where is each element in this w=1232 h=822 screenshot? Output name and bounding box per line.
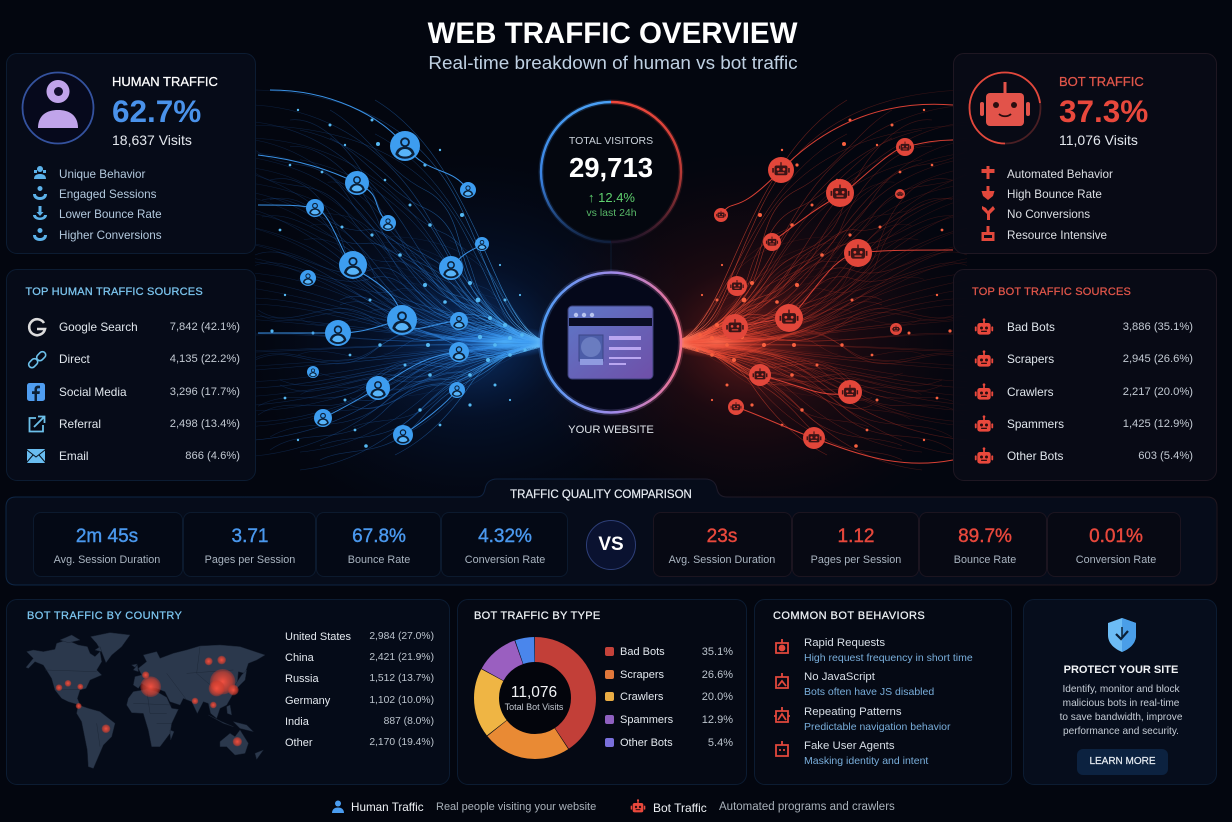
bot metric cells xyxy=(653,512,1181,577)
icon: shield xyxy=(1108,618,1136,652)
panel: protect your site: performance and security. xyxy=(1063,726,1179,736)
footer legend xyxy=(332,799,895,814)
panel: protect your site xyxy=(1023,599,1217,785)
icon: facebook xyxy=(27,383,45,401)
panel: protect your site: malicious bots in real-time xyxy=(1063,698,1179,709)
panel: bot traffic: Resource Intensive xyxy=(1007,228,1107,242)
panel: bot traffic: High Bounce Rate xyxy=(1007,188,1102,200)
panel: top bot sources: Other Bots xyxy=(1007,448,1063,462)
panel: bot traffic by type: 12.9% xyxy=(702,714,733,726)
text: Automated programs and crawlers xyxy=(719,800,895,812)
behavior icons xyxy=(774,639,790,757)
text: Pages per Session xyxy=(811,554,901,566)
behavior heading: COMMON BOT BEHAVIORS xyxy=(773,610,925,622)
vs badge: VS xyxy=(598,534,624,555)
panel: top human sources: Referral xyxy=(59,416,101,430)
panel: human traffic: Engaged Sessions xyxy=(59,188,156,200)
icon: crawlers xyxy=(974,383,994,400)
human traffic nodes xyxy=(300,131,489,445)
behavior: fake user agents xyxy=(804,740,928,767)
donut centre caption: Total Bot Visits xyxy=(505,702,563,712)
panel: bot traffic by country: Russia xyxy=(285,673,319,685)
text: 2m 45s xyxy=(76,526,138,546)
panel: bot traffic by country: Other xyxy=(285,736,313,748)
panel: bot traffic by country: 2,984 (27.0%) xyxy=(369,631,434,642)
panel: human traffic: Higher Conversions xyxy=(59,228,162,242)
panel: bot traffic by type: 20.0% xyxy=(702,691,733,703)
bot node links xyxy=(721,104,953,463)
panel: top bot sources: Scrapers xyxy=(1007,352,1054,366)
panel: top human sources: Direct xyxy=(59,352,90,366)
text: Conversion Rate xyxy=(465,554,545,566)
panel: common bot behaviors: Predictable navigation behavior xyxy=(804,720,951,732)
panel: bot traffic by type: Bad Bots xyxy=(620,646,665,658)
panel: top bot sources: 603 (5.4%) xyxy=(1138,450,1193,462)
panel: top human sources: 2,498 (13.4%) xyxy=(170,418,240,430)
text: 23s xyxy=(707,526,737,546)
icon: referral xyxy=(28,416,46,432)
panel: top human sources: 4,135 (22.2%) xyxy=(170,353,240,365)
panel: top human sources xyxy=(6,269,256,481)
icon: google xyxy=(28,318,47,337)
text: Bounce Rate xyxy=(954,554,1016,566)
text: 89.7% xyxy=(958,526,1012,546)
panel: bot traffic by type: Scrapers xyxy=(620,668,664,680)
panel: bot traffic by type: 5.4% xyxy=(708,737,733,749)
panel: common bot behaviors: Rapid Requests xyxy=(804,637,885,649)
bot percentage: 37.3% xyxy=(1059,92,1148,128)
world map with hotspots xyxy=(26,632,265,768)
icon: human avatar xyxy=(22,72,94,144)
icon: email xyxy=(27,449,45,463)
total visitors number: 29,713 xyxy=(569,152,653,182)
icon: spammers xyxy=(974,415,994,432)
panel: bot traffic xyxy=(953,53,1217,254)
learn more button xyxy=(1077,749,1168,775)
title: WEB TRAFFIC OVERVIEW xyxy=(428,16,797,50)
text: Real people visiting your website xyxy=(436,801,596,813)
icon: link xyxy=(28,350,46,368)
human percentage: 62.7% xyxy=(112,92,201,128)
icon: bad bots xyxy=(974,318,994,335)
behavior: rapid requests xyxy=(804,637,973,664)
human visits: 18,637 Visits xyxy=(112,132,192,148)
donut chart xyxy=(474,637,596,759)
icon: robot avatar xyxy=(968,72,1042,144)
panel: top human sources: 3,296 (17.7%) xyxy=(170,386,240,398)
text: 4.32% xyxy=(478,526,532,546)
panel: top bot sources: Crawlers xyxy=(1007,384,1054,398)
panel: top human sources: Social Media xyxy=(59,384,127,398)
total visitors ring xyxy=(541,102,681,242)
panel: bot traffic by country: 887 (8.0%) xyxy=(384,716,434,726)
panel: common bot behaviors: Masking identity and intent xyxy=(804,755,928,767)
panel: bot traffic by country: United States xyxy=(285,631,351,643)
text: Conversion Rate xyxy=(1076,554,1156,566)
bot traits list xyxy=(982,166,1113,242)
protect text xyxy=(1060,684,1182,736)
panel: bot traffic by type: Other Bots xyxy=(620,737,673,749)
icon: legend bot xyxy=(630,799,646,812)
text: Human Traffic xyxy=(351,800,424,814)
panel: bot traffic by country xyxy=(6,599,450,785)
panel: bot traffic by country: Germany xyxy=(285,694,330,706)
country table xyxy=(285,631,434,748)
panel: bot traffic by type: 26.6% xyxy=(702,668,733,680)
vs badge xyxy=(586,520,636,570)
text: Bounce Rate xyxy=(348,554,410,566)
text: Bot Traffic xyxy=(653,800,707,814)
panel: top bot sources: Spammers xyxy=(1007,416,1064,430)
subtitle: Real-time breakdown of human vs bot traffic xyxy=(428,53,798,74)
panel: bot traffic: No Conversions xyxy=(1007,208,1090,221)
panel: top human sources: 7,842 (42.1%) xyxy=(170,321,240,333)
text: 0.01% xyxy=(1089,526,1143,546)
panel: bot traffic by type xyxy=(457,599,747,785)
panel: bot traffic by country: 2,170 (19.4%) xyxy=(369,736,434,748)
human heading: HUMAN TRAFFIC xyxy=(112,74,218,89)
icon: legend human xyxy=(332,800,344,813)
panel: top bot sources: 1,425 (12.9%) xyxy=(1123,418,1193,430)
panel: human traffic xyxy=(6,53,256,254)
protect heading: PROTECT YOUR SITE xyxy=(1064,664,1178,676)
icon: scrapers xyxy=(974,350,994,367)
panel: common bot behaviors: Fake User Agents xyxy=(804,740,895,752)
text: Pages per Session xyxy=(205,554,295,566)
comparison heading: TRAFFIC QUALITY COMPARISON xyxy=(510,488,692,500)
panel: human traffic: Lower Bounce Rate xyxy=(59,208,162,221)
panel: top human sources: Google Search xyxy=(59,320,138,334)
panel: top bot sources: Bad Bots xyxy=(1007,320,1055,334)
panel: bot traffic by type: Crawlers xyxy=(620,691,663,703)
donut centre total: 11,076 xyxy=(511,684,557,700)
panel: bot traffic by country: 1,102 (10.0%) xyxy=(369,694,434,706)
panel: bot traffic by country: India xyxy=(285,716,309,728)
panel: top bot sources: 3,886 (35.1%) xyxy=(1123,321,1193,333)
behavior: no javascript xyxy=(804,671,934,698)
icon: other bots xyxy=(974,447,994,464)
total visitors label: TOTAL VISITORS xyxy=(569,134,653,146)
learn more button: LEARN MORE xyxy=(1089,756,1156,767)
website ring and browser icon xyxy=(541,272,681,412)
your website label: YOUR WEBSITE xyxy=(568,424,654,436)
behavior: repeating patterns xyxy=(804,706,951,732)
panel: bot traffic by country: 2,421 (21.9%) xyxy=(369,652,434,663)
panel: bot traffic by type: Spammers xyxy=(620,714,673,726)
panel: top bot sources xyxy=(953,269,1217,481)
growth period: vs last 24h xyxy=(586,207,637,219)
panel: bot traffic: Automated Behavior xyxy=(1007,168,1113,180)
panel: common bot behaviors: Repeating Patterns xyxy=(804,706,902,718)
human traits list xyxy=(33,166,162,242)
panel: human traffic: Unique Behavior xyxy=(59,168,145,180)
panel: top bot sources: 2,217 (20.0%) xyxy=(1123,386,1193,398)
human metric cells xyxy=(33,512,568,577)
panel: top bot sources: 2,945 (26.6%) xyxy=(1123,353,1193,365)
panel: bot traffic by country: China xyxy=(285,652,314,664)
panel: bot traffic by type: 35.1% xyxy=(702,646,733,658)
bot heading: BOT TRAFFIC xyxy=(1059,74,1144,89)
bot traffic nodes xyxy=(714,138,914,449)
type legend xyxy=(605,646,733,749)
bot visits: 11,076 Visits xyxy=(1059,132,1138,148)
text: 3.71 xyxy=(232,526,268,546)
panel: top human sources: Email xyxy=(59,448,88,462)
text: 67.8% xyxy=(352,526,406,546)
country heading: BOT TRAFFIC BY COUNTRY xyxy=(27,610,182,622)
panel: common bot behaviors: Bots often have JS disabled xyxy=(804,686,934,698)
panel: protect your site: Identify, monitor and block xyxy=(1062,684,1180,695)
panel: traffic quality comparison xyxy=(6,478,1218,586)
panel: common bot behaviors: No JavaScript xyxy=(804,671,875,683)
panel: common bot behaviors xyxy=(754,599,1012,785)
sources heading: TOP HUMAN TRAFFIC SOURCES xyxy=(26,286,203,298)
text: 1.12 xyxy=(838,526,874,546)
bot sources heading: TOP BOT TRAFFIC SOURCES xyxy=(972,286,1131,298)
panel: common bot behaviors: High request frequency in short time xyxy=(804,652,973,664)
growth change: ↑ 12.4% xyxy=(588,190,635,205)
text: Avg. Session Duration xyxy=(669,554,775,566)
panel: protect your site: to save bandwidth, improve xyxy=(1060,712,1182,723)
text: Avg. Session Duration xyxy=(54,554,160,566)
panel: top human sources: 866 (4.6%) xyxy=(185,450,240,462)
panel: bot traffic by country: 1,512 (13.7%) xyxy=(369,673,434,684)
human node links xyxy=(258,90,482,435)
type heading: BOT TRAFFIC BY TYPE xyxy=(474,610,601,622)
